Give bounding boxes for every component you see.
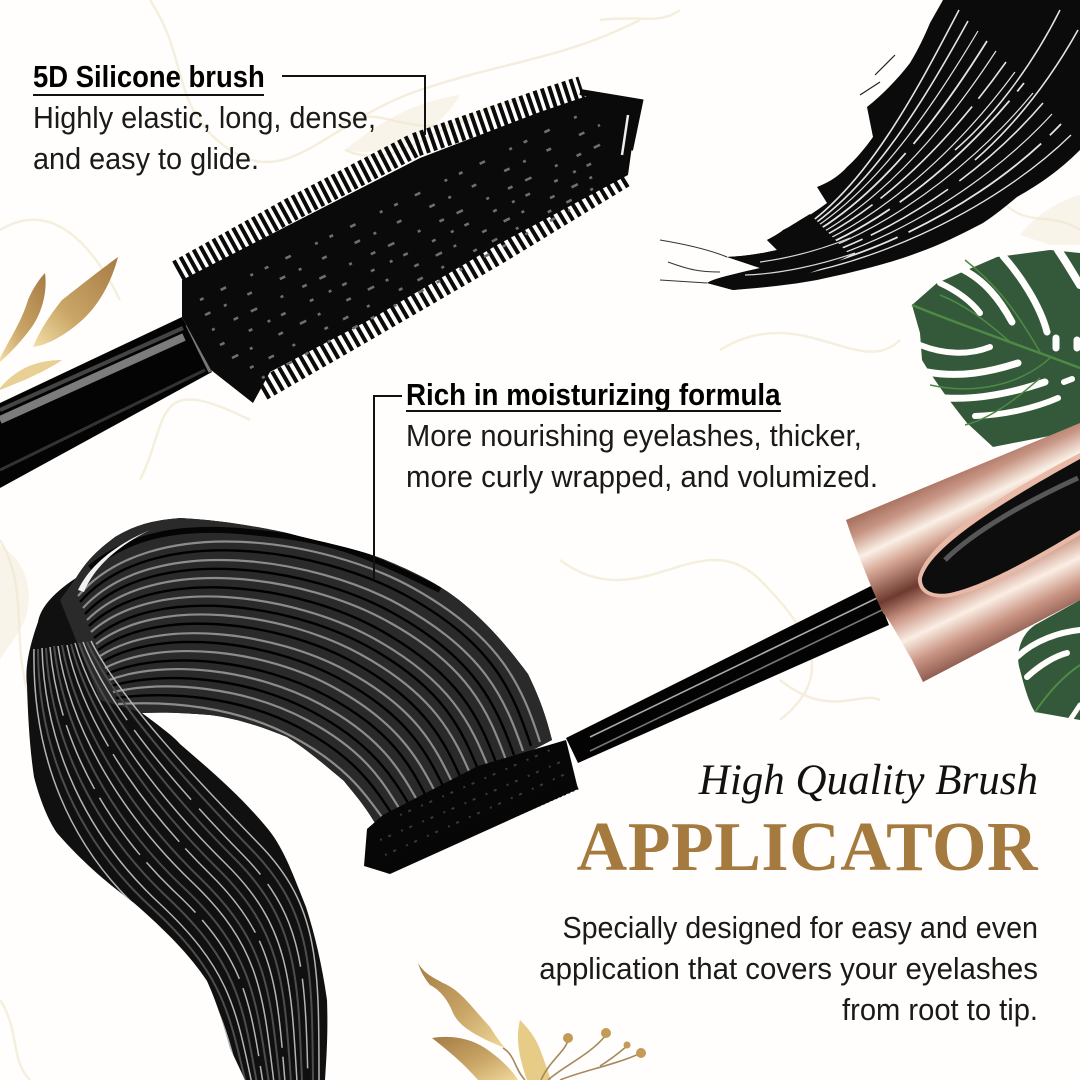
callout: moisturizing formula	[406, 377, 878, 494]
callout: silicone brush: 5D Silicone brush	[33, 59, 265, 94]
smear: top right	[660, 0, 1080, 290]
callout: silicone brush	[33, 59, 376, 176]
underline: moisturizing formula	[406, 410, 781, 412]
mascara smear: large curved	[26, 510, 560, 1080]
leaf: monstera top	[912, 250, 1080, 447]
callout: silicone brush: Highly elastic, long, dense,	[33, 100, 376, 135]
leader line: silicone brush	[282, 75, 426, 135]
leaf: gold bottom	[418, 963, 646, 1080]
description: application that covers your eyelashes	[539, 951, 1038, 986]
description	[539, 910, 1038, 1027]
flat applicator head	[364, 740, 578, 874]
callout: moisturizing formula: Rich in moisturizing formula	[406, 377, 781, 412]
description: Specially designed for easy and even	[562, 910, 1038, 945]
title: APPLICATOR	[577, 809, 1038, 886]
smear limb striations	[34, 641, 319, 1080]
leaf: gold left	[0, 257, 118, 390]
callout: moisturizing formula: more curly wrapped, and volumized.	[406, 459, 878, 494]
leaf: monstera bottom	[1017, 600, 1080, 720]
subtitle: High Quality Brush	[699, 757, 1038, 804]
underline: silicone brush	[33, 94, 264, 96]
callout: silicone brush: and easy to glide.	[33, 141, 259, 176]
description: from root to tip.	[842, 992, 1038, 1027]
leader line: moisturizing formula	[373, 395, 402, 580]
mascara wand: silicone brush	[0, 88, 640, 488]
callout: moisturizing formula: More nourishing eyelashes, thicker,	[406, 418, 862, 453]
smear arc striations	[60, 510, 560, 840]
mascara wand: rose gold handle	[566, 423, 1080, 763]
